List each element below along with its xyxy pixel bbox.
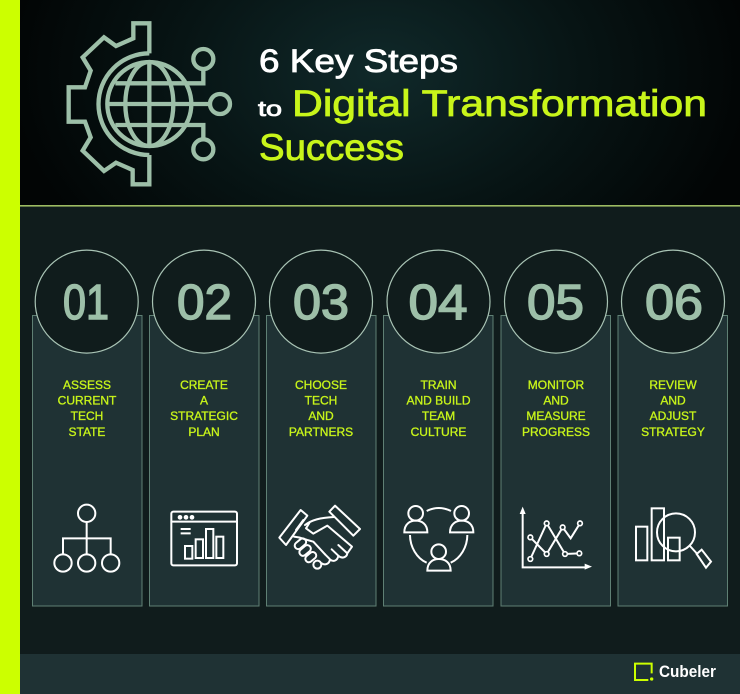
title: to [258,98,282,121]
panel: step 02: PLAN [188,425,220,439]
panel: step 05: PROGRESS [522,425,590,439]
panel: step 02: A [200,394,208,408]
left accent bar [0,0,20,694]
panel: step 05 [501,250,610,606]
icon: dashboard window [171,512,237,565]
panel: step 03: TECH [305,394,337,408]
panel: step 03 [266,250,376,606]
panel: header [20,0,740,207]
panel: step 06: REVIEW [649,378,697,392]
icon: gear and globe [69,23,230,184]
panel: step 04: TEAM [422,409,455,423]
panel: step 02: 02 [177,276,232,330]
panel: step 01: TECH [71,409,103,423]
panel: footer [20,654,740,694]
panel: step 04: 04 [408,276,468,330]
title: 6 Key Steps [259,43,458,79]
logo: Cubeler: Cubeler [659,663,717,681]
title: Digital Transformation [292,83,707,124]
panel: step 02 [150,250,259,606]
panel: step 06: 06 [645,276,703,330]
panel: step 01: ASSESS [63,378,111,392]
panel: step 01: 01 [63,276,109,330]
title [258,43,707,168]
panel: step 06: STRATEGY [641,425,705,439]
panel: step 02: STRATEGIC [170,409,238,423]
icon: chart magnifier [636,508,711,568]
panel: step 06: AND [660,394,686,408]
panel: step 06: ADJUST [650,409,697,423]
panel: step 05: MEASURE [526,409,586,423]
panel: step 06 [618,250,728,606]
logo: Cubeler [635,663,717,681]
icon: org hierarchy [54,505,119,572]
panel: step 01: STATE [69,425,105,439]
panel: step 04 [384,250,493,606]
panel: step 03: 03 [293,276,349,330]
icon: line chart [520,507,592,570]
panel: step 05: 05 [527,276,584,330]
panel: step 04: CULTURE [411,425,466,439]
panel: step 03: AND [308,409,334,423]
panel: step 02: CREATE [180,378,228,392]
icon: handshake [279,506,360,569]
icon: team circle [404,506,473,571]
panel: step 05: MONITOR [528,378,585,392]
panel: step 03: CHOOSE [295,378,347,392]
panel: step 04: AND BUILD [406,394,471,408]
panel: step 05: AND [543,394,569,408]
panel: step 01 [32,250,142,606]
title: Success [259,127,404,168]
panel: step 04: TRAIN [420,378,456,392]
panel: step 03: PARTNERS [289,425,353,439]
panel: step 01: CURRENT [58,394,117,408]
